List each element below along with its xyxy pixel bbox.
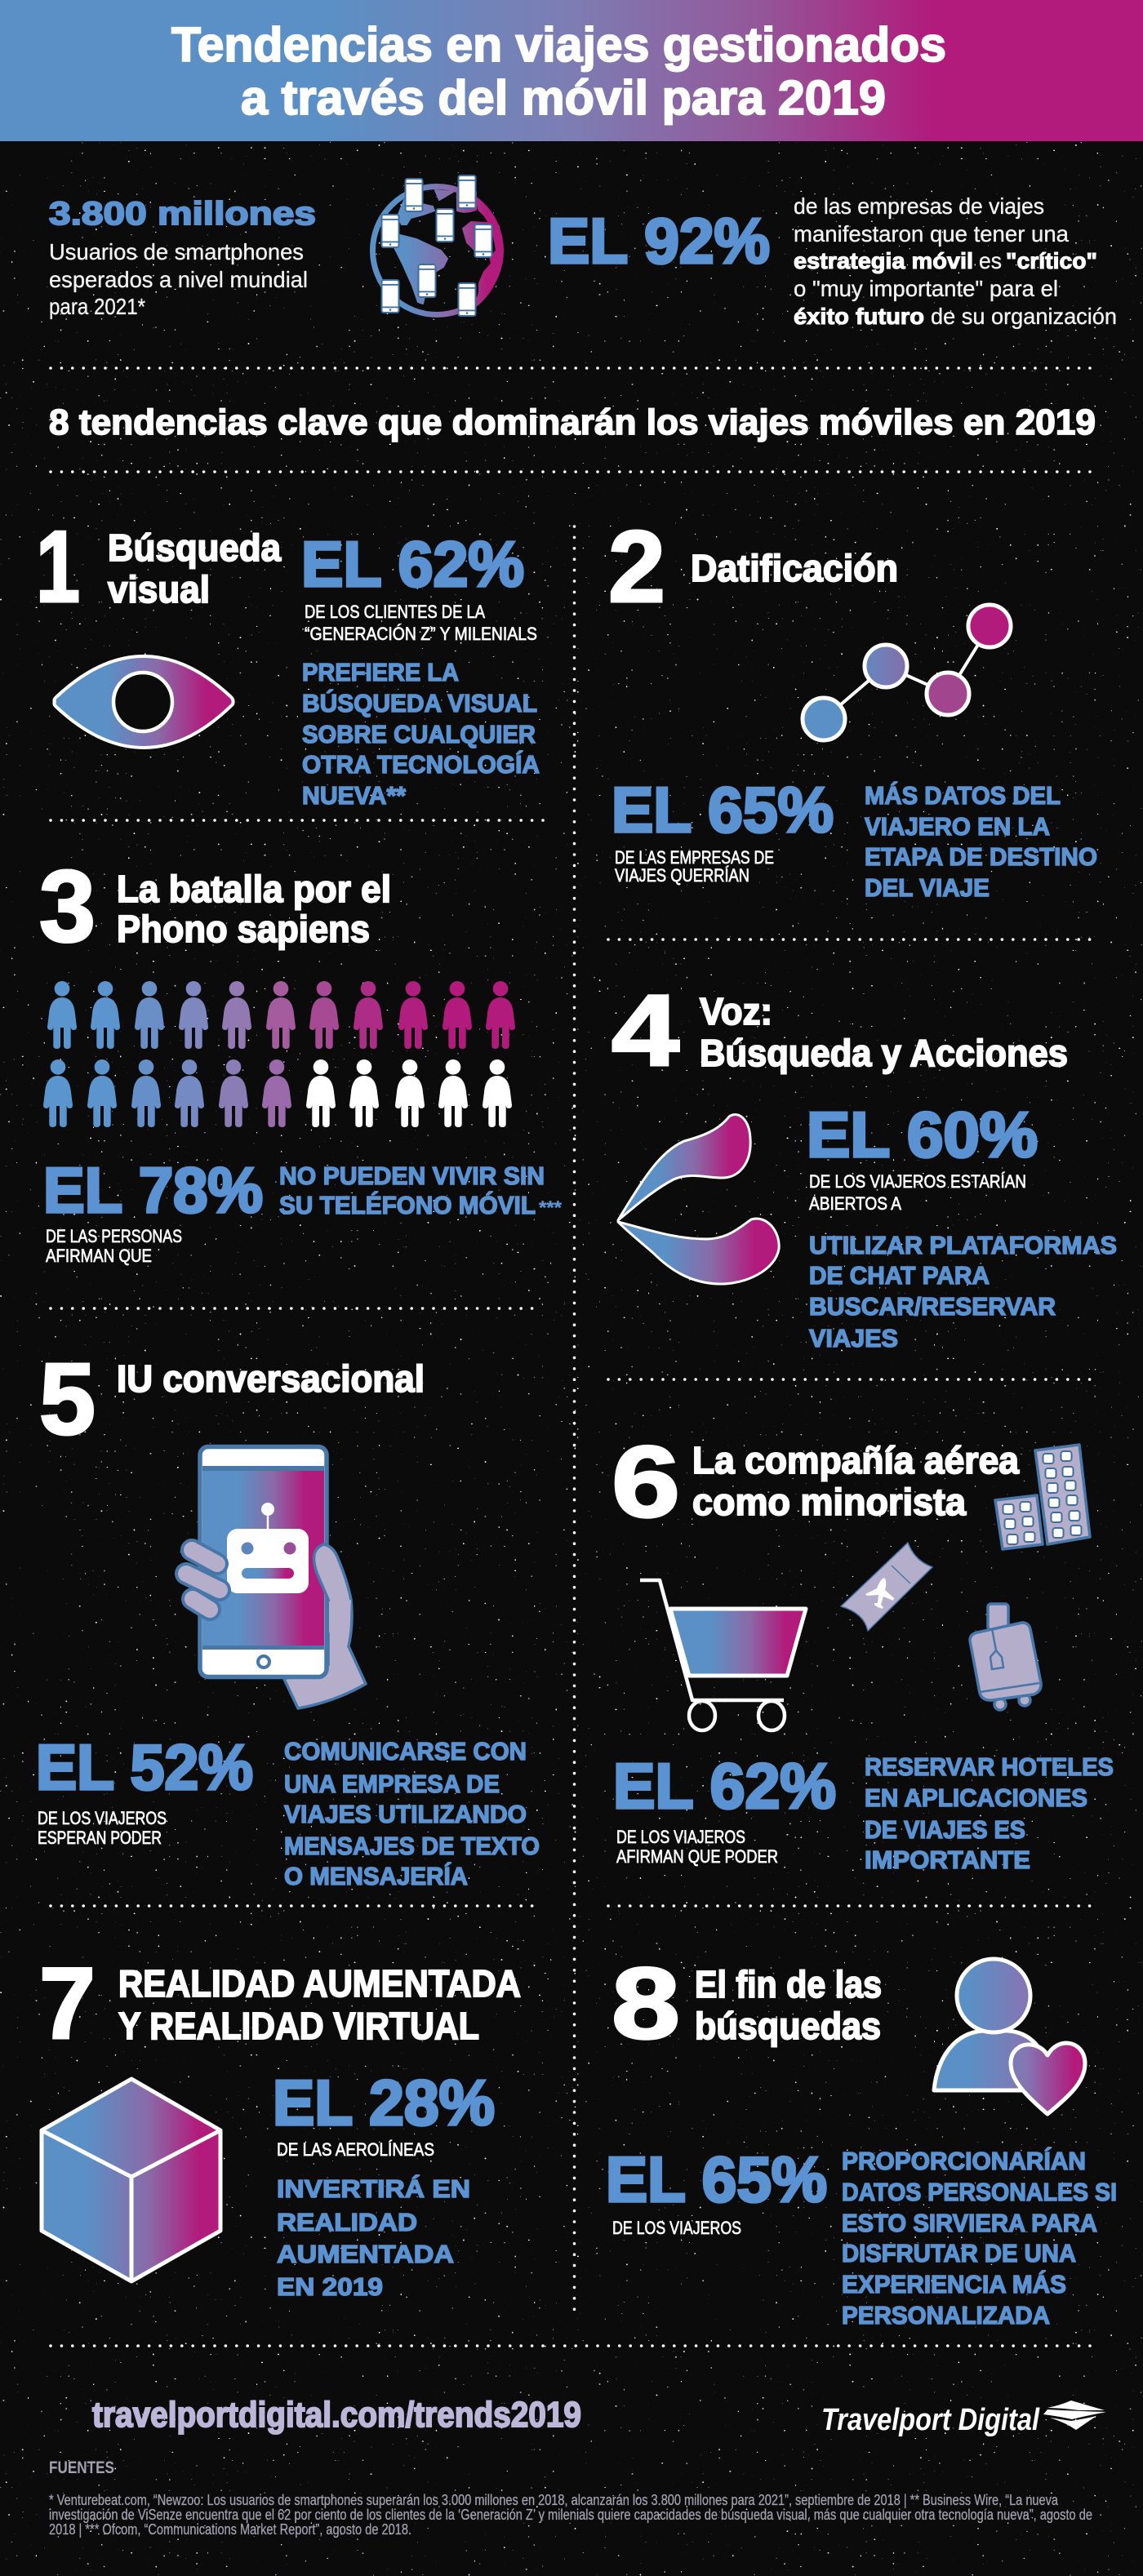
panel: trend 8 end of search: ESTO SIRVIERA PARA <box>842 2209 1097 2237</box>
panel: trend 4 voice: BUSCAR/RESERVAR <box>809 1292 1056 1321</box>
stat: 92%: de su organización <box>931 304 1117 329</box>
panel: trend 6 airline as retailer: IMPORTANTE <box>865 1845 1030 1874</box>
panel: trend 4 voice: Búsqueda y Acciones <box>700 1032 1068 1074</box>
panel: trend 4 voice: 4 <box>612 975 679 1087</box>
panel: trend 2 datafication: DE LAS EMPRESAS DE <box>615 847 774 868</box>
panel: trend 3 phono sapiens: *** <box>539 1197 562 1218</box>
header banner <box>0 0 1143 141</box>
panel: trend 1 visual search: BÚSQUEDA VISUAL <box>302 688 537 717</box>
logo: Travelport Digital: Travelport Digital <box>821 2403 1040 2437</box>
panel: trend 3 phono sapiens <box>39 851 562 1266</box>
panel: trend 4 voice: VIAJES <box>809 1324 898 1352</box>
panel: trend 6 airline as retailer: 6 <box>612 1426 680 1539</box>
panel: trend 5 conversational UI: UNA EMPRESA DE <box>284 1770 500 1798</box>
panel: trend 6 airline as retailer: AFIRMAN QUE PODER <box>616 1846 778 1867</box>
icon: eye <box>54 656 233 748</box>
icon: hotel buildings <box>995 1445 1090 1549</box>
panel: trend 8 end of search: PERSONALIZADA <box>842 2301 1050 2330</box>
panel: trend 2 datafication: ETAPA DE DESTINO <box>865 842 1097 871</box>
panel: trend 3 phono sapiens: NO PUEDEN VIVIR SIN <box>279 1161 545 1190</box>
panel: trend 7 AR and VR: REALIDAD AUMENTADA <box>118 1962 521 2005</box>
sources text <box>49 2492 1092 2538</box>
panel: trend 5 conversational UI: 5 <box>39 1344 96 1456</box>
icon: plane ticket <box>841 1543 932 1631</box>
panel: trend 7 AR and VR: 7 <box>39 1948 96 2060</box>
panel: trend 8 end of search: DE LOS VIAJEROS <box>612 2218 741 2238</box>
panel: trend 2 datafication: EL 65% <box>612 774 834 846</box>
panel: trend 1 visual search: PREFIERE LA <box>302 658 459 686</box>
panel: trend 7 AR and VR: INVERTIRÁ EN <box>277 2174 470 2203</box>
panel: trend 8 end of search: El fin de las <box>695 1963 882 2005</box>
panel: trend 5 conversational UI: IU conversacional <box>117 1357 425 1400</box>
smartphone users stat <box>49 196 316 319</box>
header banner: a través del móvil para 2019 <box>241 71 886 125</box>
panel: trend 2 datafication: DEL VIAJE <box>865 873 990 902</box>
panel: trend 7 AR and VR: AUMENTADA <box>277 2240 454 2268</box>
icon: person with heart <box>934 1959 1085 2114</box>
panel: trend 8 end of search <box>606 1948 1117 2330</box>
panel: trend 1 visual search: SOBRE CUALQUIER <box>302 720 536 748</box>
panel: trend 7 AR and VR: EN 2019 <box>277 2272 383 2301</box>
panel: trend 2 datafication <box>608 511 1097 902</box>
subtitle: 8 tendencias clave que dominarán los viajes móviles en 2019 <box>49 402 1096 442</box>
panel: trend 1 visual search: 1 <box>36 511 80 624</box>
stat: 92%: éxito futuro <box>794 304 924 329</box>
panel: trend 5 conversational UI <box>36 1344 540 1890</box>
panel: trend 4 voice: DE LOS VIAJEROS ESTARÍAN <box>809 1171 1026 1192</box>
icon: shopping cart <box>640 1580 806 1730</box>
stat: 92%: de las empresas de viajes <box>794 193 1044 219</box>
panel: trend 7 AR and VR: REALIDAD <box>277 2208 417 2236</box>
panel: trend 4 voice <box>612 975 1117 1352</box>
panel: trend 1 visual search: visual <box>108 568 210 611</box>
panel: trend 1 visual search: EL 62% <box>301 528 524 600</box>
sources heading: FUENTES <box>49 2458 114 2477</box>
icon: phone with robot and hand <box>186 1446 366 1708</box>
smartphone users stat: Usuarios de smartphones <box>49 239 304 264</box>
panel: trend 8 end of search: búsquedas <box>695 2005 881 2047</box>
panel: trend 4 voice: EL 60% <box>807 1099 1038 1170</box>
panel: trend 5 conversational UI: ESPERAN PODER <box>38 1828 162 1848</box>
smartphone users stat: esperados a nivel mundial <box>49 267 308 292</box>
panel: trend 6 airline as retailer: como minorista <box>692 1481 966 1523</box>
panel: trend 4 voice: UTILIZAR PLATAFORMAS <box>809 1231 1117 1259</box>
panel: trend 8 end of search: PROPORCIONARÍAN <box>842 2147 1086 2175</box>
icon: lips <box>618 1115 779 1284</box>
panel: trend 8 end of search: DISFRUTAR DE UNA <box>842 2239 1076 2267</box>
panel: trend 1 visual search: NUEVA** <box>302 781 407 810</box>
panel: trend 2 datafication: VIAJERO EN LA <box>865 812 1050 841</box>
panel: trend 1 visual search: DE LOS CLIENTES DE LA <box>305 602 485 622</box>
panel: trend 3 phono sapiens: SU TELÉFONO MÓVIL <box>279 1190 536 1219</box>
panel: trend 5 conversational UI: COMUNICARSE CON <box>284 1737 527 1765</box>
panel: trend 1 visual search: OTRA TECNOLOGÍA <box>302 750 540 779</box>
panel: trend 1 visual search: “GENERACIÓN Z” Y MILENIALS <box>305 624 537 644</box>
sources text: 2018 | *** Ofcom, “Communications Market Report”, agosto de 2018. <box>49 2521 411 2538</box>
panel: trend 6 airline as retailer: DE VIAJES ES <box>865 1815 1025 1844</box>
panel: trend 5 conversational UI: DE LOS VIAJEROS <box>38 1808 167 1828</box>
panel: trend 6 airline as retailer: EL 62% <box>613 1750 836 1822</box>
panel: trend 4 voice: Voz: <box>700 990 772 1033</box>
panel: trend 4 voice: ABIERTOS A <box>809 1193 901 1214</box>
panel: trend 3 phono sapiens: Phono sapiens <box>117 908 370 950</box>
panel: trend 1 visual search: Búsqueda <box>108 526 281 569</box>
panel: trend 2 datafication: Datificación <box>691 547 898 589</box>
panel: trend 3 phono sapiens: AFIRMAN QUE <box>46 1246 152 1266</box>
panel: trend 8 end of search: EL 65% <box>606 2143 827 2215</box>
header banner: Tendencias en viajes gestionados <box>171 18 946 72</box>
panel: trend 6 airline as retailer: RESERVAR HOTELES <box>865 1752 1114 1781</box>
panel: trend 3 phono sapiens: La batalla por el <box>117 868 391 910</box>
stat: 92%: EL 92% <box>548 205 770 277</box>
stat: 92% <box>548 193 1117 329</box>
panel: trend 5 conversational UI: VIAJES UTILIZANDO <box>284 1800 527 1828</box>
panel: trend 6 airline as retailer: EN APLICACIONES <box>865 1783 1087 1812</box>
panel: trend 2 datafication: 2 <box>608 511 665 624</box>
panel: trend 8 end of search: 8 <box>612 1948 680 2060</box>
stat: 92%: estrategia móvil <box>794 248 973 273</box>
panel: trend 3 phono sapiens: DE LAS PERSONAS <box>46 1226 182 1246</box>
panel: trend 7 AR and VR: Y REALIDAD VIRTUAL <box>118 2005 479 2047</box>
stat: 92%: manifestaron que tener una <box>794 221 1069 246</box>
panel: trend 3 phono sapiens: 3 <box>39 851 96 963</box>
panel: trend 2 datafication: MÁS DATOS DEL <box>865 781 1061 810</box>
icon: suitcase <box>970 1604 1041 1710</box>
panel: trend 4 voice: DE CHAT PARA <box>809 1261 990 1290</box>
stat: 92%: "crítico" <box>1006 248 1097 273</box>
panel: trend 8 end of search: DATOS PERSONALES SI <box>842 2178 1117 2206</box>
website url: travelportdigital.com/trends2019 <box>92 2395 581 2435</box>
panel: trend 5 conversational UI: EL 52% <box>36 1731 253 1803</box>
panel: trend 6 airline as retailer: La compañía aérea <box>692 1439 1019 1481</box>
panel: trend 1 visual search <box>36 511 540 810</box>
panel: trend 7 AR and VR: EL 28% <box>273 2067 495 2139</box>
panel: trend 7 AR and VR: DE LAS AEROLÍNEAS <box>277 2139 434 2160</box>
icon: globe with phones <box>372 175 501 316</box>
panel: trend 5 conversational UI: MENSAJES DE TEXTO <box>284 1832 540 1860</box>
icon: cube <box>42 2079 220 2281</box>
stat: 92%: o "muy importante" para el <box>794 276 1058 301</box>
stat: 92%: es <box>979 248 1002 273</box>
panel: trend 6 airline as retailer: DE LOS VIAJEROS <box>616 1827 745 1847</box>
panel: trend 2 datafication: VIAJES QUERRÍAN <box>615 865 749 886</box>
panel: trend 7 AR and VR <box>39 1948 521 2301</box>
icon: data graph <box>803 605 1011 740</box>
smartphone users stat: 3.800 millones <box>49 196 316 232</box>
panel: trend 6 airline as retailer <box>612 1426 1114 1874</box>
panel: trend 8 end of search: EXPERIENCIA MÁS <box>842 2270 1066 2298</box>
smartphone users stat: para 2021* <box>49 294 145 319</box>
pictogram: people rows <box>43 981 515 1127</box>
panel: trend 5 conversational UI: O MENSAJERÍA <box>284 1862 468 1890</box>
panel: trend 3 phono sapiens: EL 78% <box>43 1154 263 1226</box>
